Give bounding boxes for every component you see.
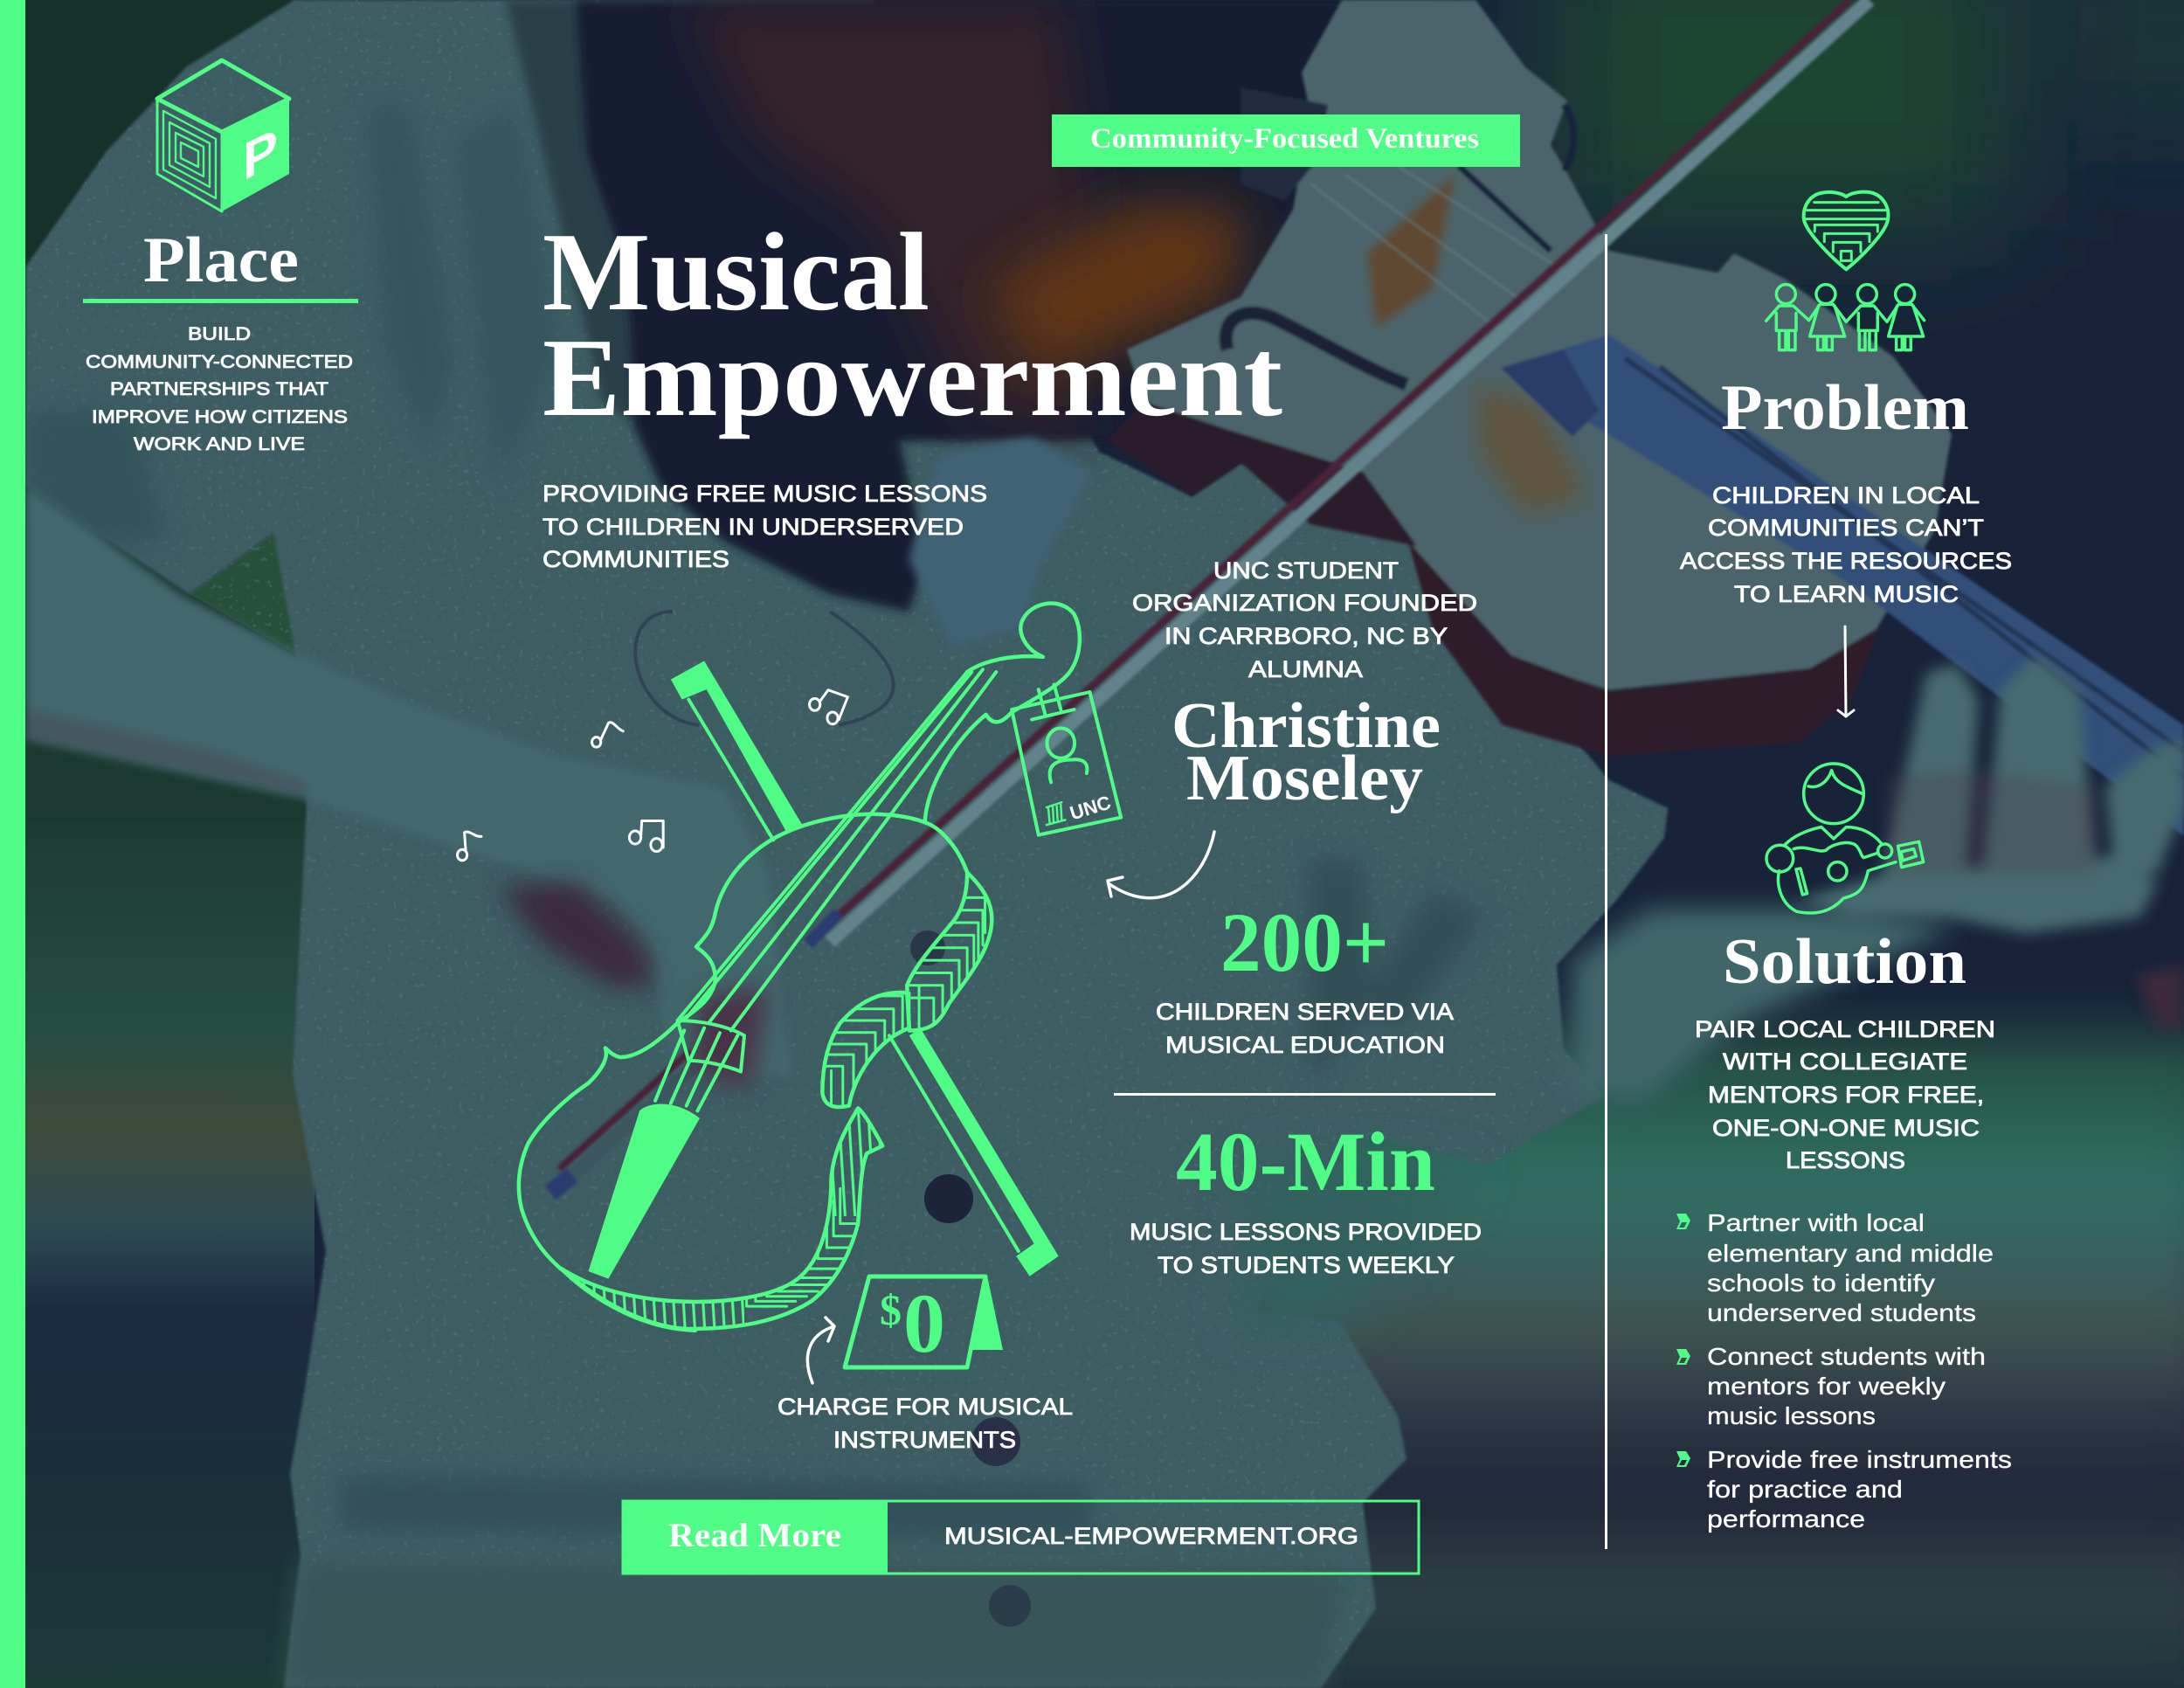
bullet 2: Connect students with <box>1707 1343 1986 1370</box>
bow upper half <box>671 661 802 840</box>
founder caption <box>1132 557 1477 682</box>
read more button: Read More <box>668 1517 841 1554</box>
bullet 1: underserved students <box>1707 1299 1976 1326</box>
underline for Place <box>83 299 358 303</box>
bullet 3: Provide free instruments <box>1707 1446 2012 1473</box>
stat: lesson length <box>1130 1115 1482 1278</box>
arrow to price tag <box>807 1318 834 1383</box>
bullet 3 <box>1676 1446 2012 1532</box>
logo: place cube: P <box>243 118 278 192</box>
main title: Empowerment <box>543 315 1282 439</box>
violin bow <box>550 0 1870 1193</box>
bullet 2 <box>1676 1343 1986 1429</box>
music notes <box>457 690 847 861</box>
read more button: MUSICAL-EMPOWERMENT.ORG <box>944 1523 1358 1549</box>
solution description: PAIR LOCAL CHILDREN <box>1695 1016 1995 1042</box>
badge label UNC: UNC <box>1068 792 1114 824</box>
price caption <box>778 1394 1073 1453</box>
price caption: INSTRUMENTS <box>833 1427 1016 1453</box>
bullet 1: Partner with local <box>1707 1209 1925 1236</box>
bow hand shadow <box>498 882 769 1088</box>
bullet 1: elementary and middle <box>1707 1240 1994 1267</box>
category tag: Community-Focused Ventures <box>1090 123 1479 155</box>
stat: children served: CHILDREN SERVED VIA <box>1156 999 1454 1025</box>
hatched middle rib <box>826 994 904 1105</box>
violin outlines <box>519 604 1080 1331</box>
hair <box>506 0 1345 725</box>
curved arrow to badge <box>1108 832 1214 898</box>
price tag: $0: $ <box>880 1285 902 1334</box>
Place description <box>86 324 353 454</box>
violin body <box>1108 0 2184 836</box>
icon: child with guitar <box>1766 764 1924 913</box>
bullet 1: schools to identify <box>1707 1269 1935 1297</box>
price tag: $0: 0 <box>903 1276 945 1370</box>
logo: place cube <box>157 60 289 211</box>
tailpiece <box>588 1104 700 1279</box>
bullet list <box>1676 1209 2012 1532</box>
stat: children served: 200+ <box>1220 896 1389 989</box>
stat: lesson length: MUSIC LESSONS PROVIDED <box>1130 1219 1482 1245</box>
Place description: IMPROVE HOW CITIZENS <box>92 407 348 427</box>
badge building icon <box>1047 802 1065 825</box>
left accent bar <box>0 0 25 1688</box>
founder name: Christine <box>1171 690 1441 762</box>
strings and fingerboard <box>655 669 996 1110</box>
subtitle: PROVIDING FREE MUSIC LESSONS <box>543 481 987 507</box>
subtitle: TO CHILDREN IN UNDERSERVED <box>543 514 964 540</box>
stat: children served <box>1156 896 1454 1058</box>
hatched lower rib <box>562 1108 882 1329</box>
price caption: CHARGE FOR MUSICAL <box>778 1394 1073 1420</box>
founder caption: ALUMNA <box>1248 656 1363 682</box>
violin and bow illustration <box>457 604 1121 1331</box>
bullet 3: performance <box>1707 1505 1865 1532</box>
bullet 3: for practice and <box>1707 1476 1903 1503</box>
lanyard badge <box>1012 684 1121 835</box>
icon: striped heart <box>1804 192 1888 269</box>
category tag <box>1052 114 1520 167</box>
problem description: COMMUNITIES CAN’T <box>1708 515 1984 541</box>
founder caption: ORGANIZATION FOUNDED <box>1132 590 1477 616</box>
problem description: ACCESS THE RESOURCES <box>1680 548 2012 574</box>
main title <box>543 210 1282 439</box>
stat: children served: MUSICAL EDUCATION <box>1165 1032 1445 1058</box>
Place description: COMMUNITY-CONNECTED <box>86 352 353 372</box>
heading: Solution: Solution <box>1723 926 1966 998</box>
arm <box>25 485 791 1083</box>
solution description: MENTORS FOR FREE, <box>1708 1082 1984 1108</box>
arrow: problem to solution <box>1838 626 1854 716</box>
icon: four children <box>1766 285 1925 350</box>
bullet 1 <box>1676 1209 1994 1326</box>
founder caption: UNC STUDENT <box>1213 557 1399 584</box>
main title: Musical <box>543 210 930 334</box>
solution description: WITH COLLEGIATE <box>1723 1048 1967 1075</box>
problem description <box>1680 482 2012 607</box>
heading: Place: Place <box>143 225 299 296</box>
problem description: CHILDREN IN LOCAL <box>1712 482 1980 508</box>
problem description: TO LEARN MUSIC <box>1734 581 1959 607</box>
subtitle <box>543 481 987 572</box>
solution description: ONE-ON-ONE MUSIC <box>1712 1115 1980 1141</box>
bullet 2: music lessons <box>1707 1402 1876 1429</box>
Place description: BUILD <box>188 324 251 344</box>
heading: Problem: Problem <box>1721 372 1969 444</box>
Place description: PARTNERSHIPS THAT <box>110 379 328 399</box>
price tag: $0 <box>845 1276 1003 1370</box>
stat: lesson length: TO STUDENTS WEEKLY <box>1158 1252 1455 1278</box>
shirt collar <box>909 437 1092 647</box>
founder caption: IN CARRBORO, NC BY <box>1165 623 1448 649</box>
wrist and fretting hand <box>1572 655 2184 1101</box>
solution description: LESSONS <box>1786 1147 1905 1173</box>
Place description: WORK AND LIVE <box>134 434 305 454</box>
read more button <box>623 1500 1419 1574</box>
solution description <box>1695 1016 1995 1173</box>
hatched upper rib <box>909 896 987 1028</box>
founder name <box>1171 690 1441 814</box>
bow lower half <box>889 1028 1059 1276</box>
bullet 2: mentors for weekly <box>1707 1373 1946 1400</box>
subtitle: COMMUNITIES <box>543 546 729 572</box>
stat: lesson length: 40-Min <box>1176 1115 1435 1208</box>
founder name: Moseley <box>1186 743 1423 814</box>
cardigan buttons <box>910 930 1031 1627</box>
